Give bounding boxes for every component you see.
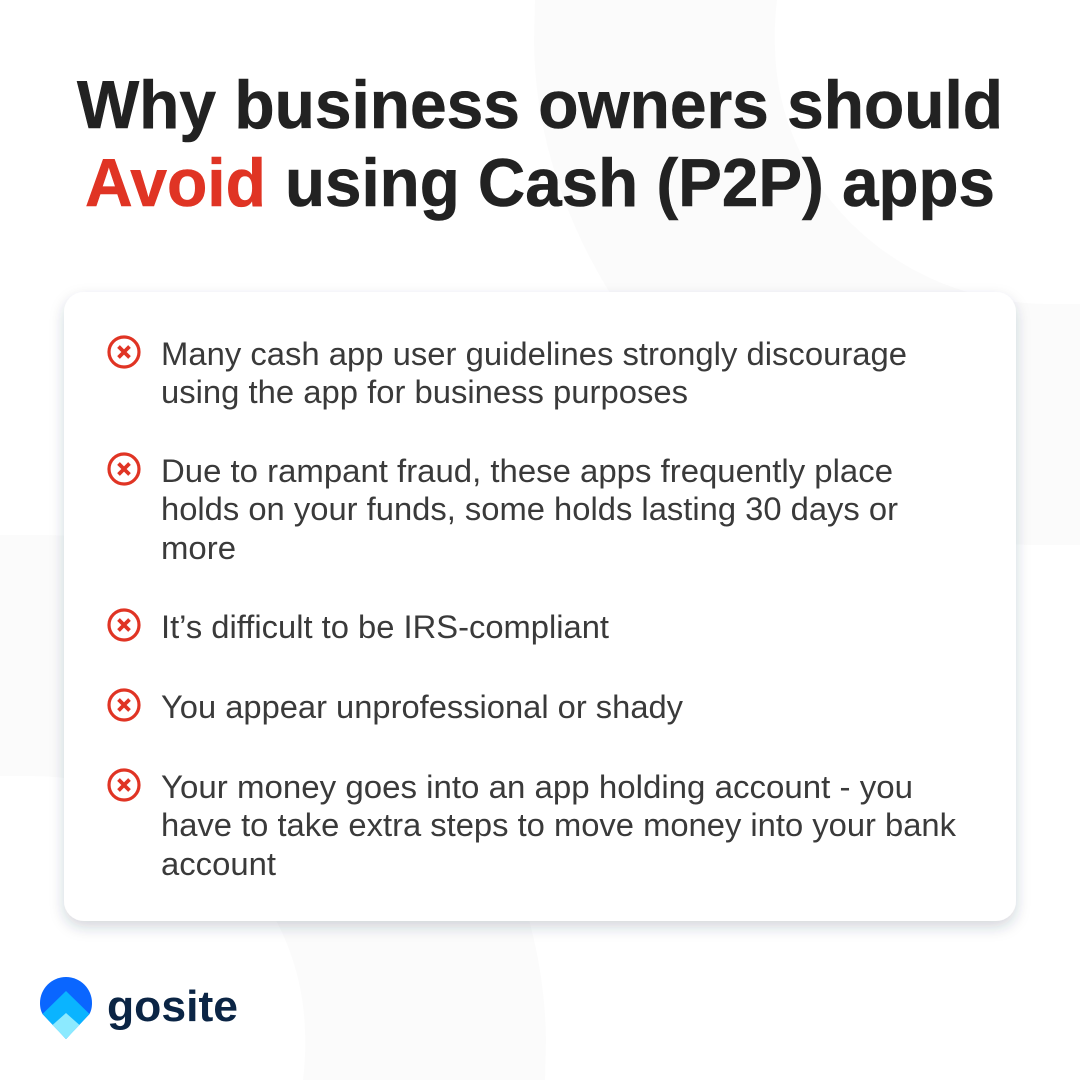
title: Avoid bbox=[85, 145, 266, 221]
title: Why business owners should bbox=[77, 67, 1003, 143]
reason 3: It’s difficult to be IRS-compliant bbox=[161, 609, 609, 645]
reason 5 bbox=[109, 769, 957, 882]
title: using Cash (P2P) apps bbox=[285, 145, 995, 221]
reason 2: holds on your funds, some holds lasting 30 days or bbox=[161, 491, 898, 527]
reason 2 bbox=[109, 453, 898, 566]
reason 5: Your money goes into an app holding account - you bbox=[161, 769, 913, 805]
reason 1: using the app for business purposes bbox=[161, 374, 688, 410]
reason 5: have to take extra steps to move money into your bank bbox=[161, 807, 957, 843]
icon: red x circle bbox=[109, 454, 139, 484]
reason 2: more bbox=[161, 530, 236, 566]
icon: red x circle bbox=[109, 690, 139, 720]
reason 5: account bbox=[161, 846, 276, 882]
icon: location pin bbox=[40, 977, 92, 1039]
icon: red x circle bbox=[109, 337, 139, 367]
icon: red x circle bbox=[109, 770, 139, 800]
panel: reasons card bbox=[64, 292, 1016, 921]
background ribbon: top right bbox=[534, 0, 1080, 545]
logo: gosite bbox=[40, 977, 238, 1039]
reason 1: Many cash app user guidelines strongly discourage bbox=[161, 336, 907, 372]
reason 2: Due to rampant fraud, these apps frequently place bbox=[161, 453, 893, 489]
icon: red x circle bbox=[109, 610, 139, 640]
reason 4: You appear unprofessional or shady bbox=[161, 689, 683, 725]
background ribbon: bottom left bbox=[0, 535, 546, 1080]
title bbox=[77, 67, 1003, 221]
wordmark: gosite bbox=[107, 982, 238, 1031]
reason 1 bbox=[109, 336, 907, 410]
